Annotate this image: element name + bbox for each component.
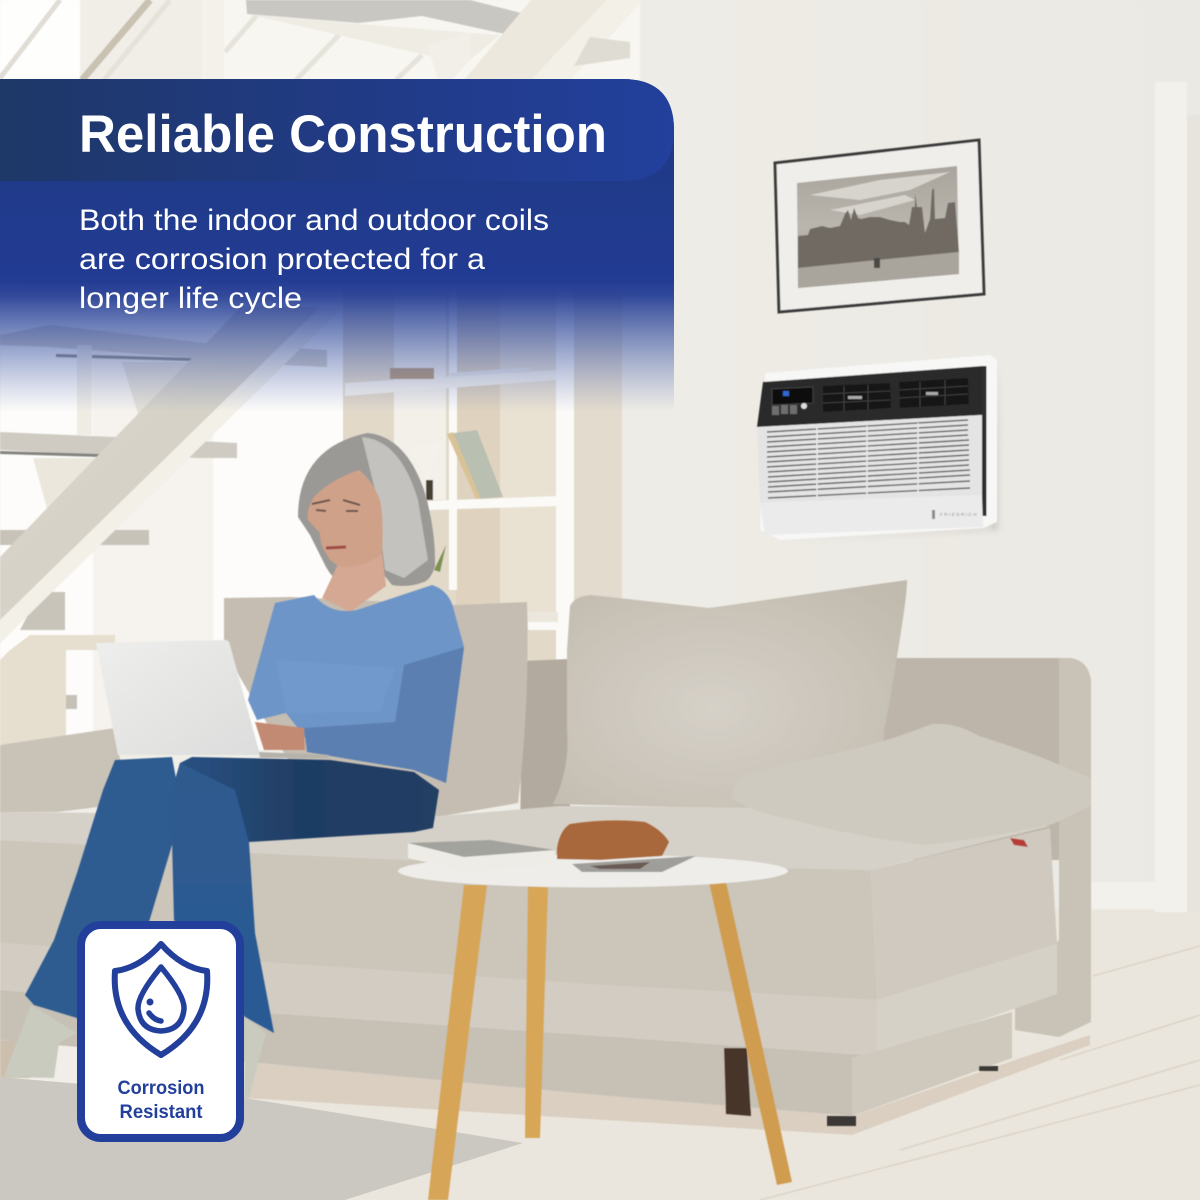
badge label: Corrosion [118,1078,204,1099]
hair [298,433,435,586]
skyline photo [797,166,959,288]
title bar [0,79,674,181]
sofa base [0,990,877,1116]
upper wall segment [80,0,203,80]
newel post [204,0,224,80]
baseboard [1091,882,1171,909]
rear cushion behind woman [224,597,528,817]
upper beam [464,0,607,80]
clouds [810,172,950,215]
plant [434,545,446,572]
door frame [1155,82,1187,912]
upper tread [247,14,500,60]
sofa arm [1015,658,1091,1037]
grille [757,415,982,503]
sofa [0,580,1091,1126]
seat front [0,840,877,1000]
badge label: Resistant [120,1102,203,1123]
air conditioner [757,355,998,542]
hand [255,722,305,750]
floor [240,910,1200,1200]
corrosion resistant badge [81,925,240,1138]
book stack [390,368,434,379]
dark sofa leg [724,1048,751,1116]
wall shadow [780,362,998,542]
leather case [557,820,669,860]
shelves [345,370,556,396]
table top [398,854,788,888]
neck [322,553,386,612]
description [79,204,549,315]
brand: FRIEDRICH [940,512,978,517]
table legs [428,885,487,1200]
water [798,252,959,288]
woman [4,433,464,1098]
icon: shield with water drop [115,944,207,1055]
display [772,387,813,405]
description: Both the indoor and outdoor coils [79,204,549,237]
rails [0,0,422,80]
seat side [871,828,1057,1000]
sleeve [304,647,464,783]
lower staircase [0,307,343,745]
seat top [0,806,1050,870]
description: longer life cycle [79,282,302,315]
near jeans shin [167,763,274,1033]
badge label [118,1078,204,1123]
leaning book [447,430,503,499]
title: Reliable Construction [79,105,607,164]
wall picture [775,140,984,312]
white uprights [449,290,457,590]
side pillow [732,724,1090,845]
fading blue panel [0,79,674,412]
wall ledge [0,635,115,745]
sofa back [520,659,570,850]
tablet [572,856,696,872]
black control panel [757,366,983,427]
brows, eyes and mouth [312,500,360,511]
swimmer [874,258,880,268]
upper staircase [0,0,643,80]
frame [775,140,984,312]
rug [0,1077,523,1200]
notebook [408,840,555,871]
window area [0,290,345,750]
text panel [0,79,674,412]
laptop [96,640,329,758]
flat papers [450,367,530,377]
far sock [4,1005,77,1078]
near sock [244,1017,266,1098]
badge card [81,925,240,1138]
far jeans leg [25,757,180,1040]
upper left bright area [0,0,640,80]
picture frame on shelf [408,443,440,482]
blue sweater [248,585,464,783]
torso fold [276,660,395,713]
casters [827,1066,998,1126]
sofa tag [1010,838,1028,847]
coffee table [398,820,792,1200]
face [308,470,383,567]
front band [0,943,877,1056]
description: are corrosion protected for a [79,243,485,276]
floor planks [760,946,1200,1200]
mounting frame [760,355,997,540]
stair treads [0,325,327,709]
left pillow [0,728,125,812]
near jeans thigh [167,757,439,842]
pale column [93,330,213,750]
bottom cover [760,495,983,535]
large pillow [553,580,907,812]
vents [823,383,891,412]
skyline buildings [798,188,959,268]
stair beam [0,307,343,643]
bookshelf [343,290,622,665]
